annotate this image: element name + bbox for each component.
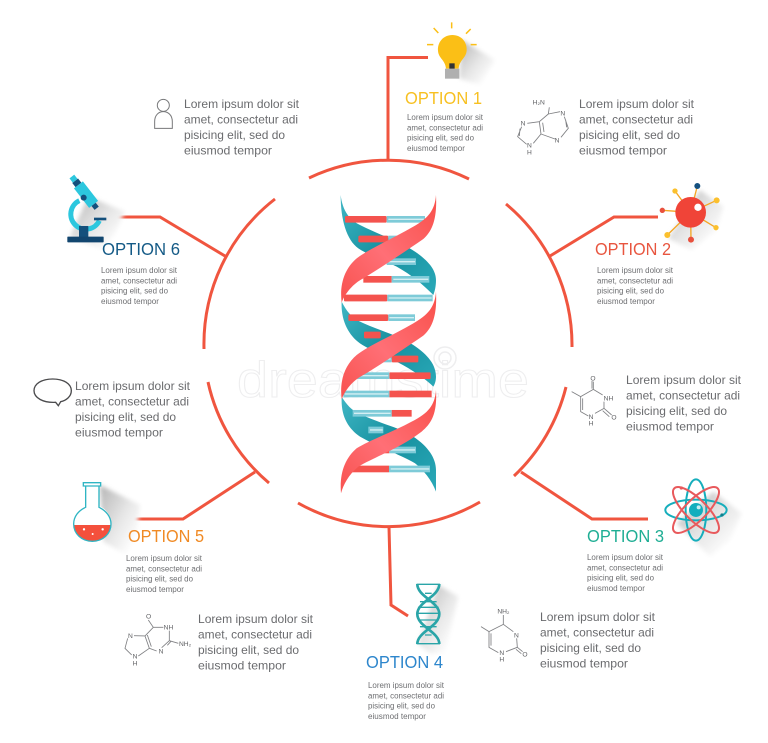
- text block: [407, 113, 484, 153]
- heading: OPTION 1: [405, 88, 482, 108]
- icon: thymine molecule: N: [589, 414, 594, 421]
- text block: pisicing elit, sed do: [540, 641, 641, 655]
- text block: [75, 379, 191, 440]
- connector option 3: [521, 472, 648, 519]
- icon: molecule: [660, 183, 723, 250]
- option 5: [74, 483, 204, 594]
- connector option 2: [550, 217, 658, 256]
- text block: amet, consectetur adi: [587, 563, 663, 572]
- text block: amet, consectetur adi: [540, 626, 654, 640]
- note: person: [155, 97, 300, 158]
- text block: [597, 266, 674, 306]
- icon: adenine molecule: N: [560, 110, 565, 117]
- text block: pisicing elit, sed do: [75, 410, 176, 424]
- text block: eiusmod tempor: [540, 656, 628, 670]
- heading: OPTION 6: [102, 239, 180, 259]
- text block: Lorem ipsum dolor sit: [75, 379, 191, 393]
- note: thymine: [572, 373, 742, 434]
- text block: Lorem ipsum dolor sit: [126, 554, 203, 563]
- text block: pisicing elit, sed do: [184, 128, 285, 142]
- text block: [184, 97, 300, 158]
- icon: adenine molecule: H₂N: [533, 100, 545, 107]
- heading: OPTION 4: [366, 652, 443, 672]
- text block: pisicing elit, sed do: [597, 287, 665, 296]
- teal strands: [341, 195, 436, 492]
- icon: adenine molecule: H: [527, 150, 532, 157]
- text block: eiusmod tempor: [587, 584, 645, 593]
- icon: microscope: [67, 173, 125, 250]
- text block: amet, consectetur adi: [368, 691, 444, 700]
- icon: guanine molecule: [125, 614, 192, 667]
- text block: amet, consectetur adi: [75, 394, 189, 408]
- text block: pisicing elit, sed do: [101, 287, 169, 296]
- text block: pisicing elit, sed do: [368, 702, 436, 711]
- icon: guanine molecule: H: [133, 660, 138, 667]
- icon: guanine molecule: NH₂: [179, 641, 192, 648]
- option 6: [67, 173, 180, 306]
- icon: small DNA: [417, 584, 458, 653]
- icon: cytosine molecule: H: [499, 657, 504, 664]
- icon: thymine molecule: NH: [604, 395, 613, 402]
- text block: Lorem ipsum dolor sit: [368, 681, 445, 690]
- text block: eiusmod tempor: [126, 585, 184, 594]
- icon: light bulb: [427, 22, 495, 85]
- text block: eiusmod tempor: [407, 144, 465, 153]
- icon: thymine molecule: [572, 375, 617, 428]
- icon: cytosine molecule: [481, 609, 528, 664]
- note: speech bubble: [34, 379, 191, 440]
- central ring arcs: [204, 160, 572, 527]
- icon: cytosine molecule: N: [514, 633, 519, 640]
- heading: OPTION 5: [128, 526, 204, 546]
- text block: pisicing elit, sed do: [126, 575, 194, 584]
- text block: pisicing elit, sed do: [626, 404, 727, 418]
- text block: eiusmod tempor: [184, 144, 272, 158]
- text block: [198, 612, 314, 672]
- icon: guanine molecule: N: [159, 649, 164, 656]
- icon: adenine molecule: N: [555, 138, 560, 145]
- icon: person: [155, 99, 172, 128]
- text block: amet, consectetur adi: [407, 123, 483, 132]
- text block: [368, 681, 445, 721]
- icon: cytosine molecule: N: [499, 650, 504, 657]
- option 4: [366, 584, 458, 721]
- icon: guanine molecule: N: [128, 633, 133, 640]
- text block: eiusmod tempor: [579, 144, 667, 158]
- text block: Lorem ipsum dolor sit: [626, 373, 742, 387]
- text block: Lorem ipsum dolor sit: [407, 113, 484, 122]
- text block: amet, consectetur adi: [597, 276, 673, 285]
- DNA double helix: [341, 195, 436, 493]
- icon: guanine molecule: O: [146, 614, 151, 621]
- text block: Lorem ipsum dolor sit: [198, 612, 314, 626]
- text block: amet, consectetur adi: [198, 628, 312, 642]
- text block: eiusmod tempor: [198, 658, 286, 672]
- connector option 4: [389, 527, 408, 616]
- connector option 6: [117, 217, 225, 256]
- icon: adenine molecule: [518, 100, 568, 157]
- heading: OPTION 2: [595, 239, 671, 259]
- note: cytosine: [481, 609, 656, 670]
- base pair rungs: [343, 216, 433, 472]
- text block: eiusmod tempor: [368, 712, 426, 721]
- watermark: dreamstime: [237, 352, 529, 408]
- text block: eiusmod tempor: [75, 426, 163, 440]
- note: guanine: [125, 612, 314, 672]
- icon: thymine molecule: O: [611, 415, 617, 422]
- text block: amet, consectetur adi: [184, 112, 298, 126]
- text block: [101, 266, 178, 306]
- text block: amet, consectetur adi: [101, 276, 177, 285]
- icon: atom: [665, 479, 742, 557]
- icon: flask: [74, 483, 140, 555]
- connector option 1: [388, 58, 428, 160]
- text block: amet, consectetur adi: [626, 388, 740, 402]
- text block: amet, consectetur adi: [579, 112, 693, 126]
- text block: Lorem ipsum dolor sit: [540, 610, 656, 624]
- text block: [126, 554, 203, 594]
- icon: guanine molecule: N: [133, 653, 138, 660]
- text block: pisicing elit, sed do: [587, 574, 655, 583]
- option 1: [405, 22, 495, 153]
- text block: [587, 553, 664, 593]
- text block: eiusmod tempor: [597, 297, 655, 306]
- icon: guanine molecule: NH: [164, 625, 173, 632]
- text block: Lorem ipsum dolor sit: [597, 266, 674, 275]
- option 3: [587, 479, 742, 593]
- text block: pisicing elit, sed do: [407, 134, 475, 143]
- icon: adenine molecule: N: [521, 120, 526, 127]
- icon: cytosine molecule: NH₂: [497, 609, 510, 616]
- icon: adenine molecule: N: [527, 143, 532, 150]
- icon: speech bubble: [34, 379, 71, 406]
- text block: amet, consectetur adi: [126, 564, 202, 573]
- text block: Lorem ipsum dolor sit: [579, 97, 695, 111]
- text block: pisicing elit, sed do: [579, 128, 680, 142]
- heading: OPTION 3: [587, 526, 664, 546]
- text block: Lorem ipsum dolor sit: [184, 97, 300, 111]
- text block: eiusmod tempor: [101, 297, 159, 306]
- icon: cytosine molecule: O: [522, 651, 528, 658]
- text block: eiusmod tempor: [626, 420, 714, 434]
- text block: Lorem ipsum dolor sit: [587, 553, 664, 562]
- icon: thymine molecule: O: [590, 375, 596, 382]
- icon: thymine molecule: H: [589, 421, 594, 428]
- text block: [626, 373, 742, 434]
- text block: [540, 610, 656, 670]
- text block: pisicing elit, sed do: [198, 643, 299, 657]
- red strands: [341, 195, 436, 493]
- option 2: [595, 183, 723, 306]
- connector option 5: [127, 472, 255, 519]
- text block: [579, 97, 695, 158]
- note: adenine: [518, 97, 695, 158]
- text block: Lorem ipsum dolor sit: [101, 266, 178, 275]
